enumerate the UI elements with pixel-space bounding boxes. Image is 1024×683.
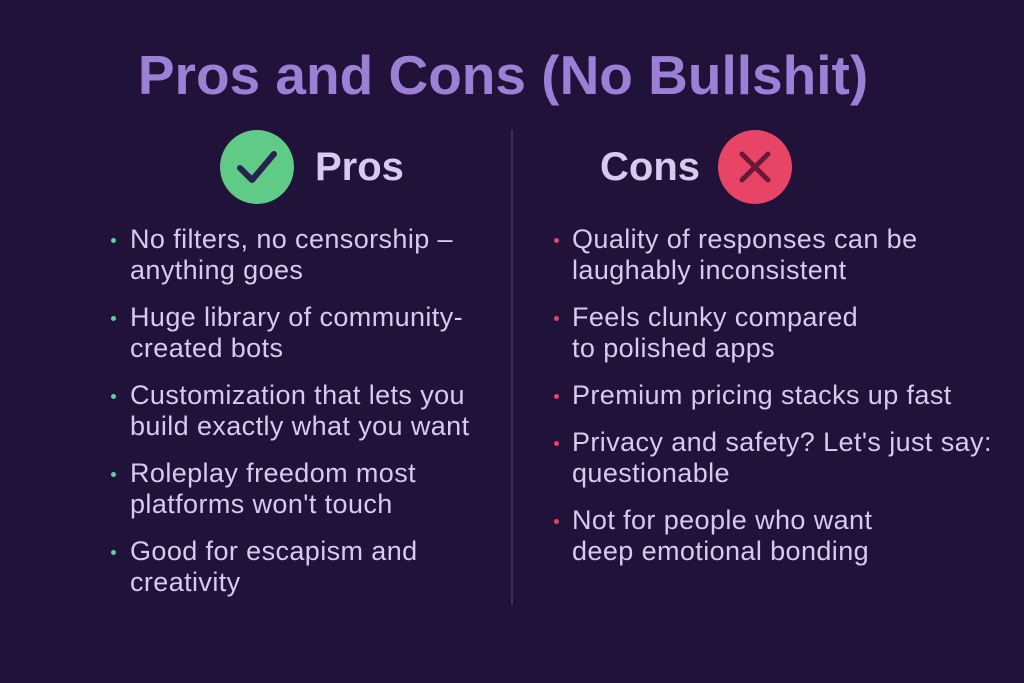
pros list: Good for escapism and: [130, 536, 418, 566]
pros list: created bots: [130, 333, 283, 363]
cons header: [600, 130, 792, 204]
cons list: Not for people who want: [572, 505, 872, 535]
cons list: Privacy and safety? Let's just say:: [572, 427, 992, 457]
cons list: to polished apps: [572, 333, 775, 363]
cons list: Premium pricing stacks up fast: [572, 380, 952, 410]
pros list: build exactly what you want: [130, 411, 469, 441]
cons list: deep emotional bonding: [572, 536, 869, 566]
cons list: [554, 224, 992, 566]
icon: check: [220, 130, 294, 204]
pros list: creativity: [130, 567, 241, 597]
title: Pros and Cons (No Bullshit): [138, 44, 868, 106]
cons list: questionable: [572, 458, 730, 488]
pros header: [220, 130, 404, 204]
pros list: anything goes: [130, 255, 303, 285]
pros list: Customization that lets you: [130, 380, 465, 410]
heading: Pros: Pros: [315, 145, 404, 189]
cons list: Feels clunky compared: [572, 302, 858, 332]
pros list: Roleplay freedom most: [130, 458, 416, 488]
heading: Cons: Cons: [600, 145, 700, 189]
cons list: laughably inconsistent: [572, 255, 846, 285]
divider: [511, 130, 513, 605]
cons list: Quality of responses can be: [572, 224, 918, 254]
pros list: No filters, no censorship –: [130, 224, 453, 254]
pros list: [111, 224, 469, 597]
pros list: Huge library of community-: [130, 302, 463, 332]
pros list: platforms won't touch: [130, 489, 393, 519]
icon: x: [718, 130, 792, 204]
